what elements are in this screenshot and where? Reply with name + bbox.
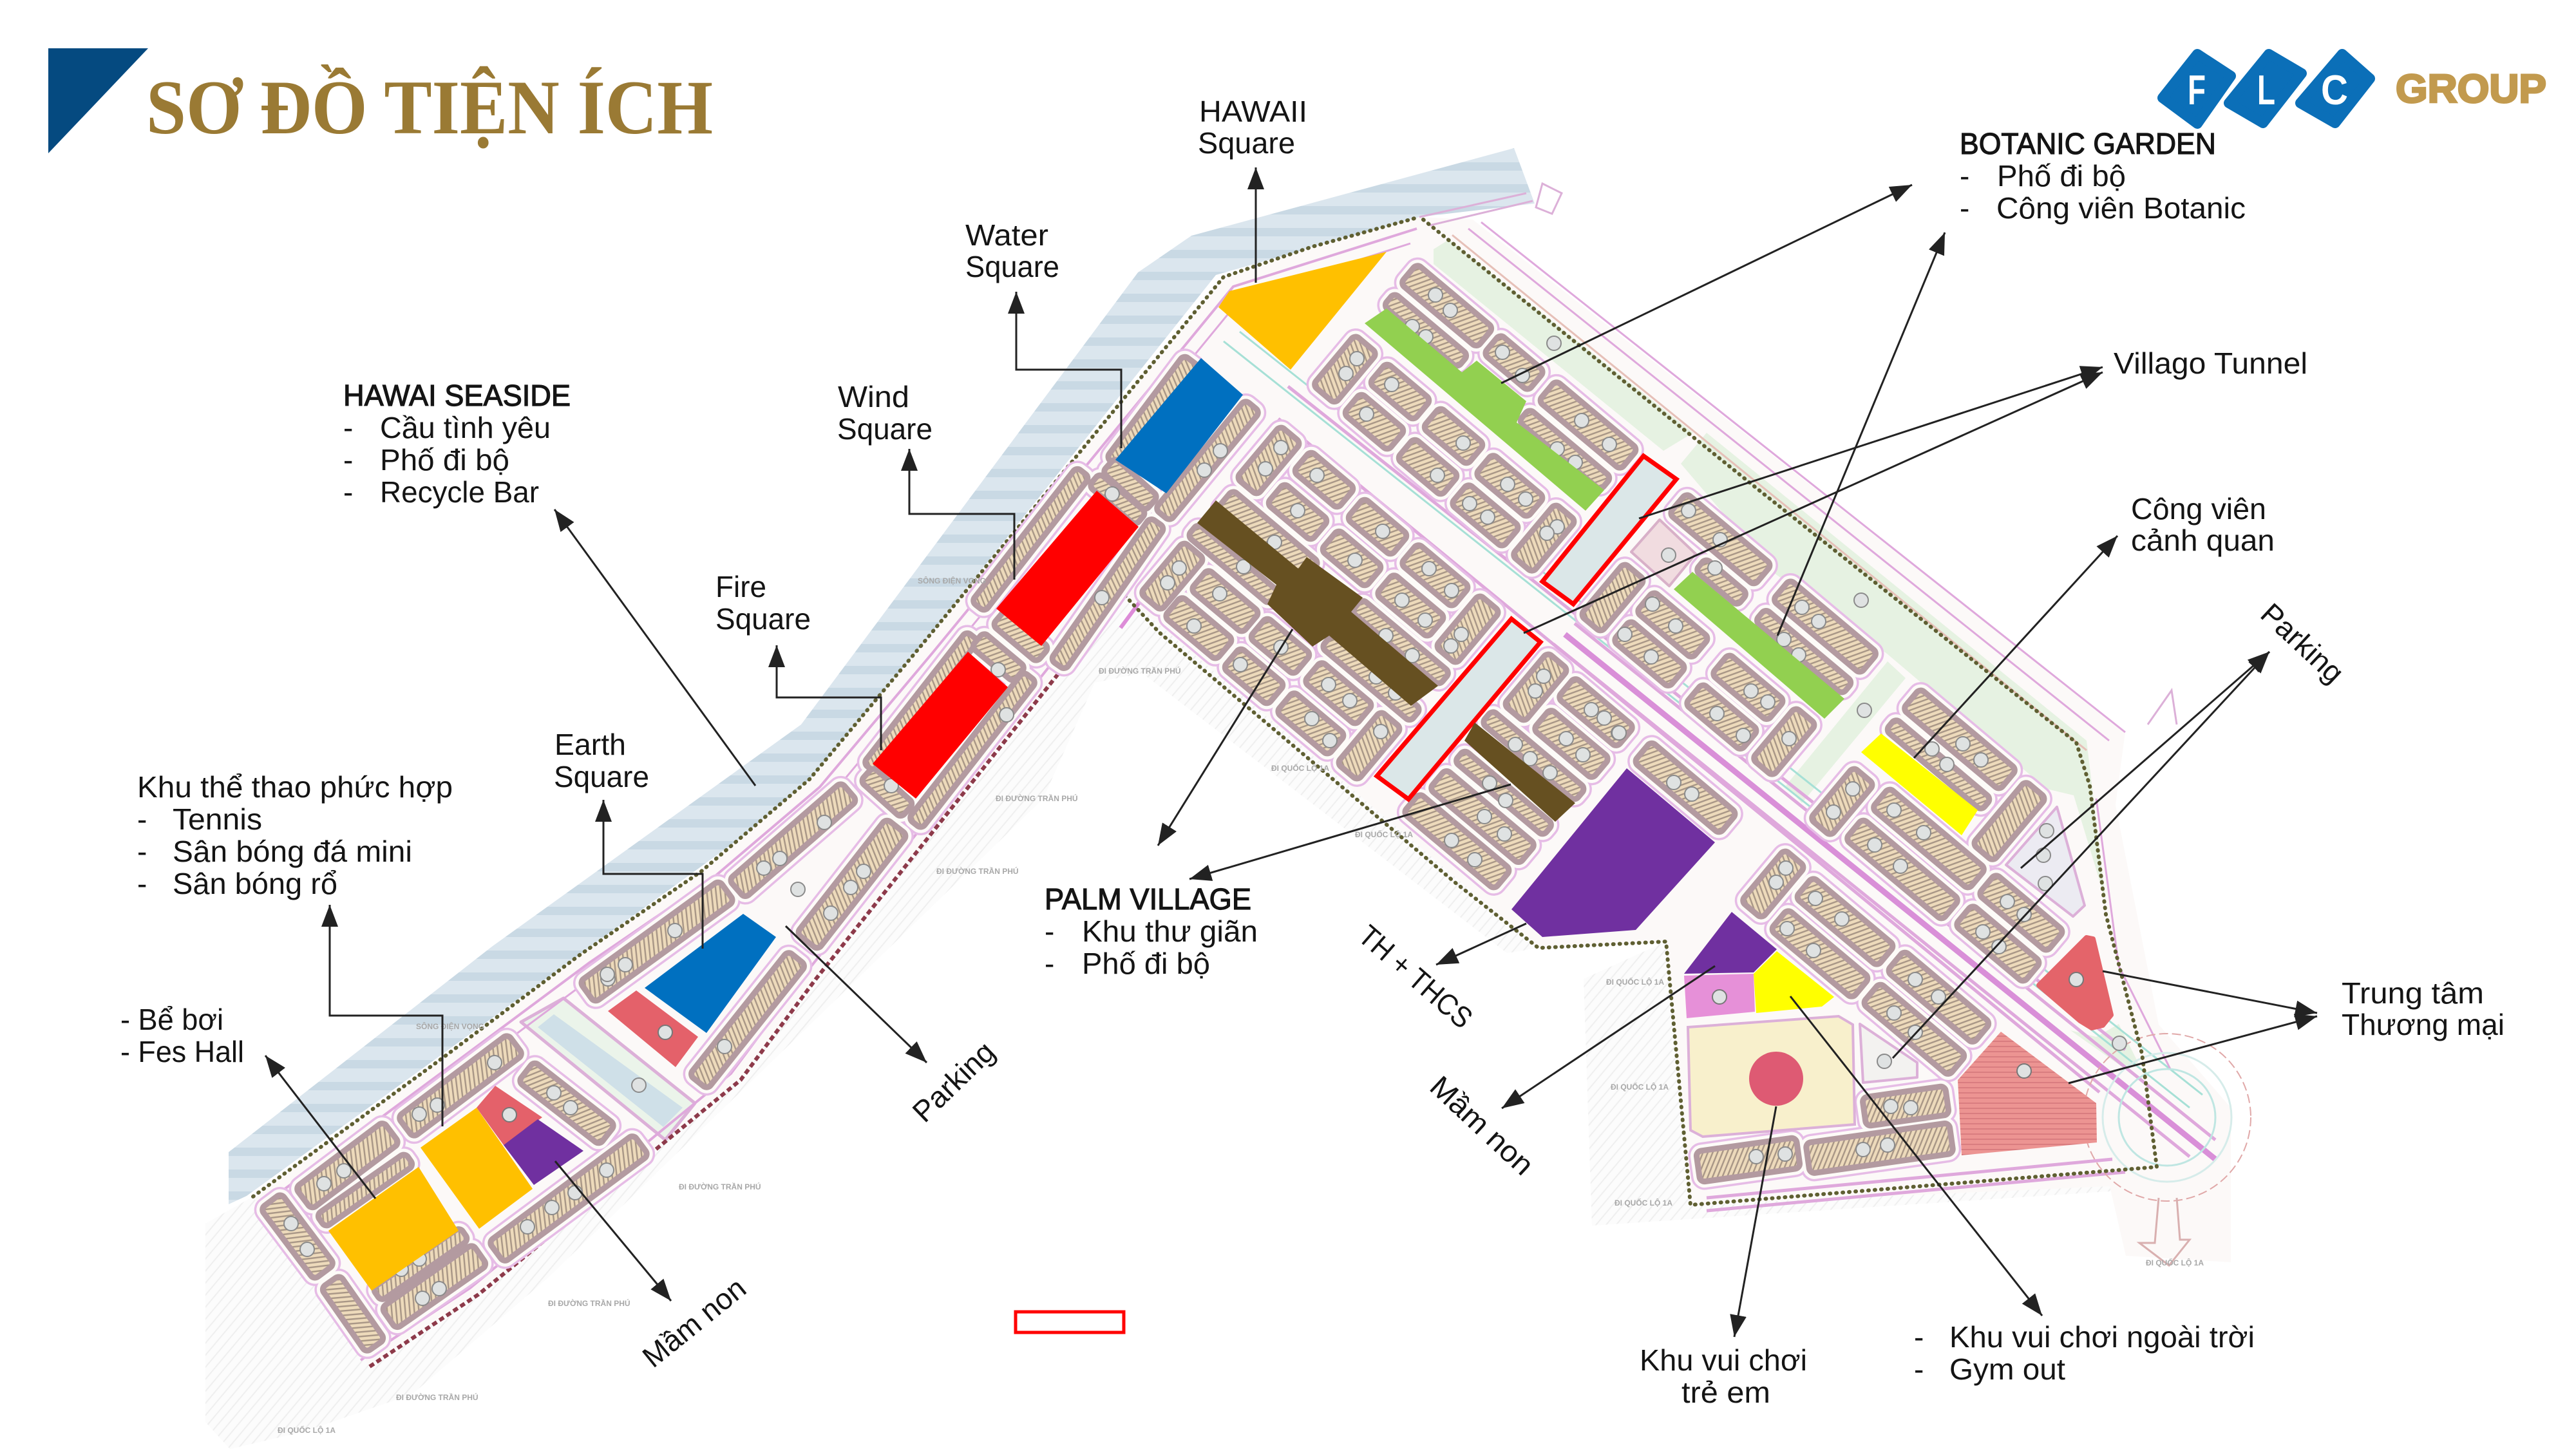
zone: Villago tunnel upper xyxy=(1542,456,1676,604)
logo: FLC Group: GROUP xyxy=(2396,67,2546,111)
arrow: Mầm non right xyxy=(1502,966,1715,1108)
tiny map road labels: ĐI ĐƯỜNG TRẦN PHÚ xyxy=(679,1182,761,1191)
tiny map road labels: ĐI QUỐC LỘ 1A xyxy=(1271,763,1329,773)
label: Wind Square xyxy=(837,380,933,446)
label: Trung tâm Thương mại: Thương mại xyxy=(2342,1008,2505,1041)
faded surroundings xyxy=(205,596,2157,1449)
label: outdoor play and gym xyxy=(1914,1320,2255,1386)
arrow: Mầm non left xyxy=(555,1161,671,1301)
arrow: Palm village 1 xyxy=(1158,629,1293,846)
arrow: Hawaii square xyxy=(1255,167,1257,283)
zone: children's park xyxy=(1688,1016,1855,1137)
label: TH + THCS: TH + THCS xyxy=(1352,918,1479,1035)
label: Khu thể thao phức hợp: - xyxy=(137,867,147,900)
arrow: Parking right 2 xyxy=(1893,652,2269,1058)
label: Khu thể thao phức hợp: - xyxy=(137,802,147,836)
zone: Botanic lower xyxy=(1674,572,1844,719)
red dashed road xyxy=(370,644,1082,1367)
label: Palm Village xyxy=(1045,882,1258,980)
label: Khu thể thao phức hợp: Khu thể thao phức hợp xyxy=(137,770,453,804)
label: Water Square: Square xyxy=(965,250,1059,283)
tiny map road labels: ĐI QUỐC LỘ 1A xyxy=(2146,1258,2204,1267)
zone: Mầm non right xyxy=(1684,912,1777,974)
arrow: Wind square xyxy=(909,449,1014,580)
label: Water Square xyxy=(965,218,1059,283)
cul-de-sacs on coloured zones xyxy=(502,972,2083,1122)
zone: children's play circle xyxy=(1749,1052,1803,1106)
plot blocks: gap xyxy=(261,264,2064,1352)
arrow: Botanic 1 xyxy=(1501,185,1912,383)
label: Hawai Seaside: - xyxy=(343,443,353,477)
tiny map road labels: ĐI QUỐC LỘ 1A xyxy=(278,1425,336,1435)
zone: pink plot xyxy=(1684,974,1755,1018)
arrow: sports complex xyxy=(330,905,442,1126)
river xyxy=(229,148,1535,1204)
arrow: outdoor play xyxy=(1790,996,2042,1316)
arrow: Villago 1 xyxy=(1639,367,2103,518)
zone: commercial large xyxy=(1958,1032,2097,1155)
label: Palm Village: - xyxy=(1045,914,1054,948)
label: Bể bơi and Fes Hall: - Bể bơi xyxy=(120,1003,223,1036)
label: outdoor play and gym: Khu vui chơi ngoài trời xyxy=(1949,1320,2255,1354)
label: Hawai Seaside: HAWAI SEASIDE xyxy=(343,379,571,412)
pale zones xyxy=(1631,520,2085,1083)
site masterplan map xyxy=(205,148,2251,1449)
label: Hawaii Square xyxy=(1198,95,1307,160)
label: Trung tâm Thương mại xyxy=(2342,976,2505,1041)
label: outdoor play and gym: Gym out xyxy=(1949,1352,2065,1386)
tiny map road labels: ĐI ĐƯỜNG TRẦN PHÚ xyxy=(548,1298,630,1308)
label: Công viên cảnh quan: Công viên xyxy=(2131,492,2266,526)
arrow: Palm village 2 xyxy=(1189,784,1511,879)
roundabout xyxy=(2083,1034,2251,1265)
entrance at river end xyxy=(1419,184,2177,724)
label: Công viên cảnh quan: cảnh quan xyxy=(2131,524,2275,557)
logo: FLC Group: C xyxy=(2321,66,2348,113)
label: Botanic Garden: Công viên Botanic xyxy=(1996,191,2246,225)
label: Hawai Seaside: Phố đi bộ xyxy=(380,443,509,477)
label: Hawai Seaside xyxy=(343,379,571,509)
label: Khu vui chơi trẻ em xyxy=(1640,1343,1807,1409)
label: Mầm non right: Mầm non xyxy=(1423,1069,1540,1182)
roads xyxy=(264,222,2215,1360)
tiny map road labels: SÔNG ĐIỆN VỌNG xyxy=(918,576,986,585)
label: Parking right: Parking xyxy=(2255,596,2351,690)
label: Botanic Garden xyxy=(1960,127,2246,225)
arrow: Botanic 2 xyxy=(1777,232,1945,636)
arrow: kids play xyxy=(1734,1106,1776,1337)
label: Earth Square xyxy=(554,728,649,793)
tiny map road labels: SÔNG ĐIỆN VỌNG xyxy=(416,1021,484,1031)
label: Palm Village: PALM VILLAGE xyxy=(1045,882,1251,916)
label: Fire Square xyxy=(715,570,811,636)
dotted boundary lines xyxy=(253,217,2157,1205)
zone: Water square xyxy=(1115,358,1243,493)
tiny map road labels: ĐI QUỐC LỘ 1A xyxy=(1611,1082,1669,1092)
tiny map road labels: ĐI QUỐC LỘ 1A xyxy=(1615,1198,1672,1208)
label: Khu thể thao phức hợp xyxy=(137,770,453,900)
label: Trung tâm Thương mại: Trung tâm xyxy=(2342,976,2484,1010)
title triangle xyxy=(48,48,148,153)
tiny map road labels: ĐI QUỐC LỘ 1A xyxy=(1355,829,1413,839)
label: outdoor play and gym: - xyxy=(1914,1352,1924,1386)
plot blocks: lots xyxy=(261,264,2064,1352)
arrow: Công viên cảnh quan xyxy=(1914,536,2117,758)
label: Bể bơi and Fes Hall xyxy=(120,1003,244,1068)
label: Fire Square: Fire xyxy=(715,570,766,603)
logo: FLC Group: L xyxy=(2257,66,2275,113)
zone: outdoor play yellow xyxy=(1754,951,1834,1013)
label: Parking left: Parking xyxy=(905,1035,1001,1128)
zone: sports orange A xyxy=(328,1167,459,1291)
zone: Botanic upper xyxy=(1365,308,1604,511)
label: Palm Village: - xyxy=(1045,947,1054,980)
label: Wind Square: Square xyxy=(837,412,933,446)
label: Khu vui chơi trẻ em: trẻ em xyxy=(1681,1376,1770,1409)
zone: Công viên cảnh quan yellow xyxy=(1861,734,1978,835)
arrow: Hawai seaside xyxy=(554,509,755,786)
label: Khu thể thao phức hợp: Sân bóng rổ xyxy=(173,867,337,900)
label: Hawaii Square: HAWAII xyxy=(1199,95,1307,128)
arrow: Parking left xyxy=(786,926,927,1063)
label: Palm Village: Khu thư giãn xyxy=(1082,914,1258,948)
arrow: Villago 2 xyxy=(1524,372,2103,633)
zone: Mầm non left xyxy=(504,1119,583,1185)
label: Khu thể thao phức hợp: Sân bóng đá mini xyxy=(173,835,412,868)
label: Botanic Garden: - xyxy=(1960,191,1969,225)
label: Botanic Garden: BOTANIC GARDEN xyxy=(1960,127,2216,160)
label: Mầm non left: Mầm non xyxy=(636,1271,752,1374)
zone: sports orange B xyxy=(421,1108,533,1229)
label: Hawai Seaside: Cầu tình yêu xyxy=(380,411,551,444)
arrow: Water square xyxy=(1016,292,1121,448)
label: Bể bơi and Fes Hall: - Fes Hall xyxy=(120,1035,244,1068)
zone: red plot lower xyxy=(477,1086,542,1145)
zone: Wind square xyxy=(996,491,1139,646)
label: Palm Village: Phố đi bộ xyxy=(1082,947,1210,980)
arrow: Commercial 2 xyxy=(2069,1016,2317,1083)
arrow: Parking right 1 xyxy=(2021,652,2269,868)
land base xyxy=(253,217,2231,1367)
zone: Palm village main xyxy=(1197,500,1438,706)
zone: Villago tunnel lower xyxy=(1377,619,1540,799)
label: Earth Square: Square xyxy=(554,760,649,793)
label: Earth Square: Earth xyxy=(554,728,626,761)
label: Công viên cảnh quan xyxy=(2131,492,2275,557)
label: Botanic Garden: - xyxy=(1960,159,1969,193)
plot blocks: outer road outline xyxy=(261,264,2064,1352)
label: Hawaii Square: Square xyxy=(1198,126,1295,160)
logo: FLC Group: F xyxy=(2188,66,2206,113)
zone: commercial teardrop xyxy=(2039,938,2111,1028)
arrow: Commercial 1 xyxy=(2103,971,2317,1013)
label: Khu thể thao phức hợp: - xyxy=(137,835,147,868)
decorative red legend box xyxy=(1016,1312,1124,1332)
label: Hawai Seaside: Recycle Bar xyxy=(380,475,539,509)
label: Hawai Seaside: - xyxy=(343,475,353,509)
zone: Earth square xyxy=(645,914,776,1033)
arrow: Earth square xyxy=(603,800,703,949)
label: Fire Square: Square xyxy=(715,602,811,636)
arrow: Fire square xyxy=(777,645,881,750)
cul-de-sacs xyxy=(284,288,2126,1305)
water park left xyxy=(521,998,695,1140)
label: Botanic Garden: Phố đi bộ xyxy=(1997,159,2126,193)
park strips xyxy=(1434,240,2138,1069)
tiny map road labels: ĐI ĐƯỜNG TRẦN PHÚ xyxy=(936,866,1019,876)
label: Khu vui chơi trẻ em: Khu vui chơi xyxy=(1640,1343,1807,1377)
label: Hawai Seaside: - xyxy=(343,411,353,444)
tiny map road labels: ĐI QUỐC LỘ 1A xyxy=(1606,977,1664,987)
tiny map road labels: ĐI ĐƯỜNG TRẦN PHÚ xyxy=(396,1392,478,1402)
title: SƠ ĐỒ TIỆN ÍCH xyxy=(146,64,713,150)
label: Water Square: Water xyxy=(965,218,1048,252)
zone: red plot left xyxy=(608,990,698,1067)
tiny map road labels: ĐI ĐƯỜNG TRẦN PHÚ xyxy=(1099,666,1181,676)
arrow: pool and fes hall xyxy=(265,1056,375,1198)
tiny map road labels xyxy=(278,576,2204,1435)
label: Khu thể thao phức hợp: Tennis xyxy=(173,802,262,836)
tiny map road labels: ĐI ĐƯỜNG TRẦN PHÚ xyxy=(996,793,1078,803)
zone: Hawaii square xyxy=(1218,252,1387,370)
zone: TH + THCS xyxy=(1511,768,1715,937)
arrow: TH + THCS xyxy=(1436,923,1526,965)
label: Wind Square: Wind xyxy=(838,380,909,413)
zone: Palm village lower xyxy=(1464,723,1575,822)
label: Villago Tunnel: Villago Tunnel xyxy=(2114,346,2307,380)
zone: Fire square xyxy=(873,652,1008,799)
label: outdoor play and gym: - xyxy=(1914,1320,1924,1354)
logo: FLC Group xyxy=(2163,54,2546,124)
